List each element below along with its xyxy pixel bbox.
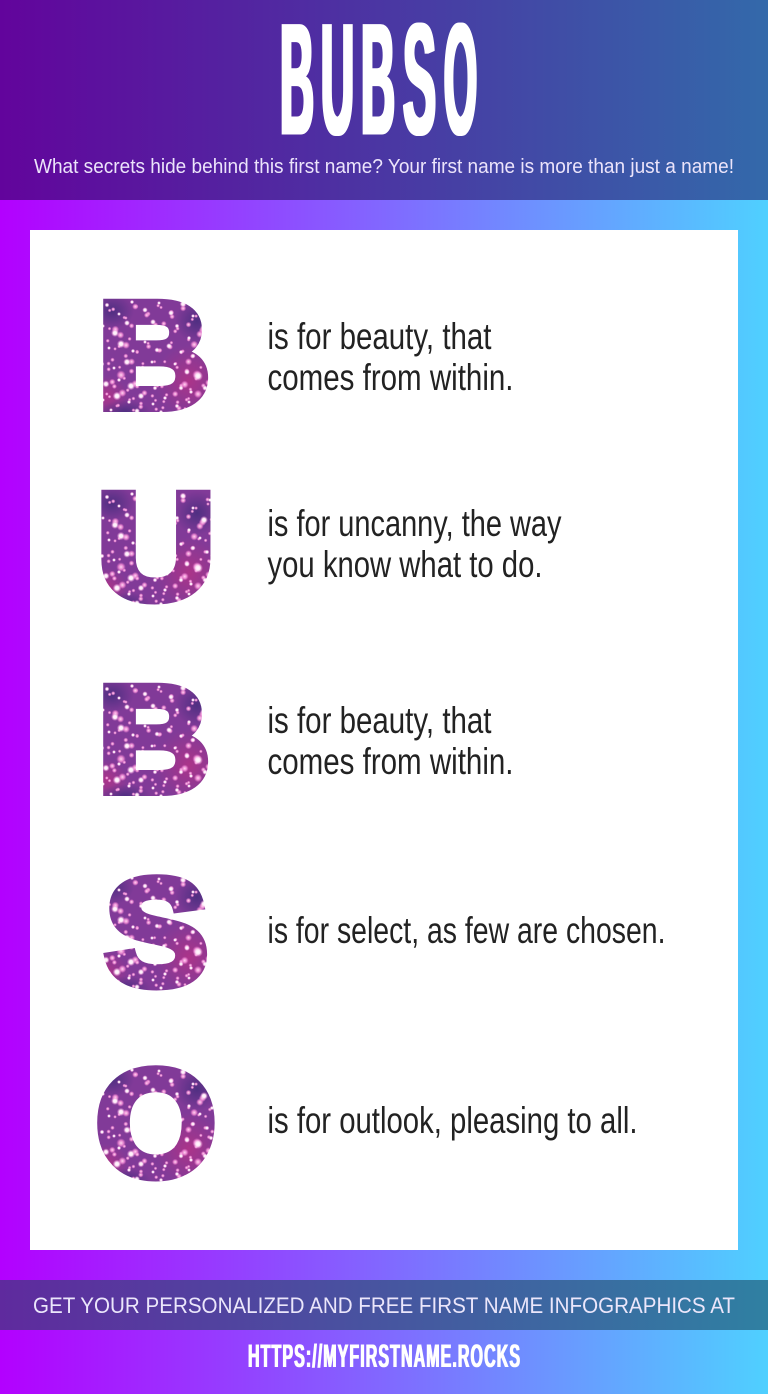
icon: galaxy letter U: U [97, 462, 215, 630]
footer band [0, 1280, 768, 1330]
footer call to action: GET YOUR PERSONALIZED AND FREE FIRST NAME INFOGRAPHICS AT [33, 1293, 735, 1318]
header band [0, 0, 768, 200]
icon: galaxy letter S: S [105, 848, 208, 1016]
text: uncanny: is for uncanny, the way [268, 503, 562, 544]
icon: galaxy letter O: O [96, 1039, 216, 1207]
subtitle: What secrets hide behind this first name? Your first name is more than just a name! [34, 156, 734, 178]
text: uncanny: you know what to do. [268, 544, 542, 585]
row: letter S [105, 848, 666, 1016]
row: letter B second [98, 655, 514, 823]
row: letter O [96, 1039, 638, 1207]
text: outlook: is for outlook, pleasing to all. [268, 1100, 638, 1141]
text: beauty: is for beauty, that [268, 700, 492, 741]
text: beauty: is for beauty, that [268, 316, 492, 357]
text: beauty: comes from within. [268, 357, 514, 398]
text: beauty: comes from within. [268, 741, 514, 782]
footer url: HTTPS://MYFIRSTNAME.ROCKS [248, 1339, 520, 1375]
panel: acrostic [30, 230, 738, 1250]
icon: galaxy letter B: B [98, 655, 210, 823]
icon: galaxy letter B: B [98, 271, 210, 439]
row: letter U [97, 462, 562, 630]
row: letter B [98, 271, 514, 439]
